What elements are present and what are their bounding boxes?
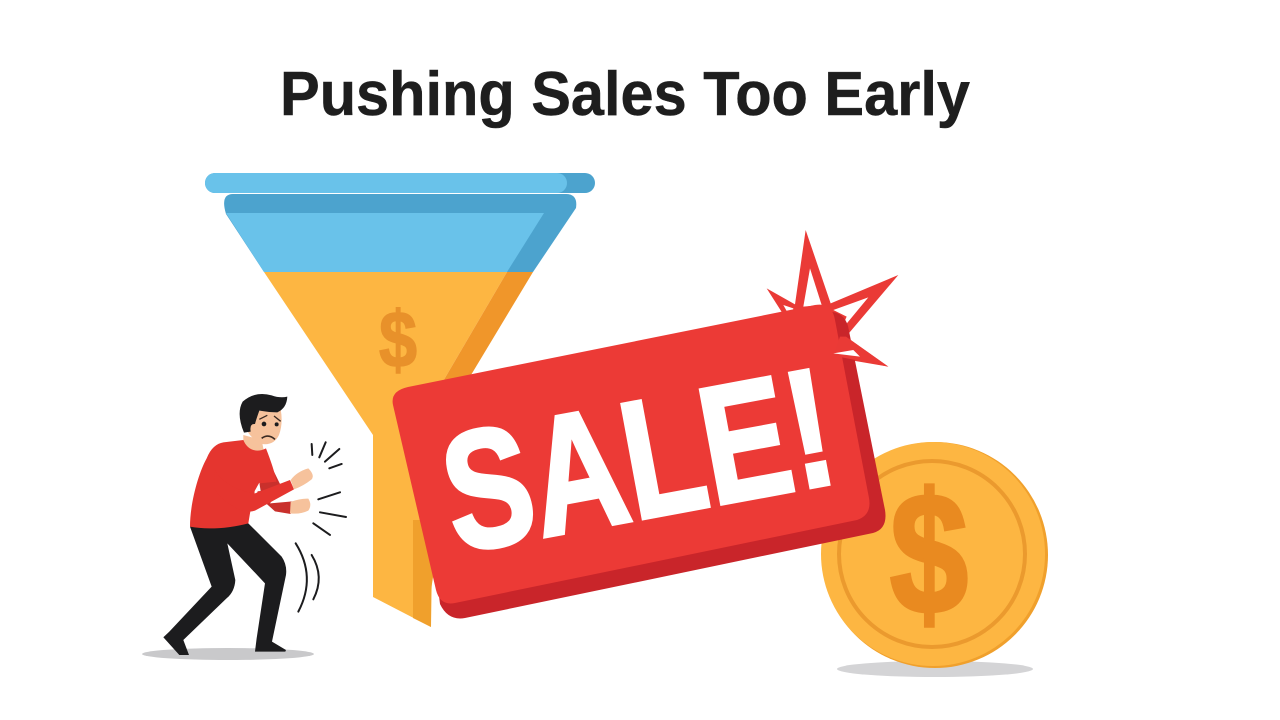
front arm xyxy=(215,470,294,512)
funnel rim xyxy=(205,173,595,193)
icon: sales funnel xyxy=(205,173,595,627)
sign face xyxy=(393,305,870,603)
man shadow xyxy=(142,648,314,660)
person: stressed man xyxy=(163,394,313,655)
sale text: SALE! xyxy=(428,332,848,588)
neck xyxy=(243,435,264,453)
face xyxy=(247,409,282,444)
frown xyxy=(262,436,275,439)
starburst behind sign xyxy=(767,230,898,367)
funnel dollar sign: $ xyxy=(379,295,417,384)
icon: gold coin xyxy=(821,442,1048,668)
sale sign xyxy=(393,305,886,618)
trousers and shoes xyxy=(163,523,286,655)
gap between arms xyxy=(254,483,261,492)
sign edge xyxy=(415,312,886,618)
icon: gold coin: $ xyxy=(890,458,968,650)
sweater xyxy=(190,440,277,528)
funnel yellow section xyxy=(264,272,533,627)
motion lines xyxy=(296,442,346,612)
title: Pushing Sales Too Early xyxy=(280,60,970,129)
starburst overlap xyxy=(833,337,888,367)
back arm xyxy=(257,457,293,514)
eyes and brows xyxy=(259,415,281,426)
coin shadow xyxy=(837,661,1033,677)
funnel blue section xyxy=(224,194,576,272)
lower hand xyxy=(290,499,310,514)
upper hand xyxy=(291,468,313,489)
hair xyxy=(240,394,287,433)
